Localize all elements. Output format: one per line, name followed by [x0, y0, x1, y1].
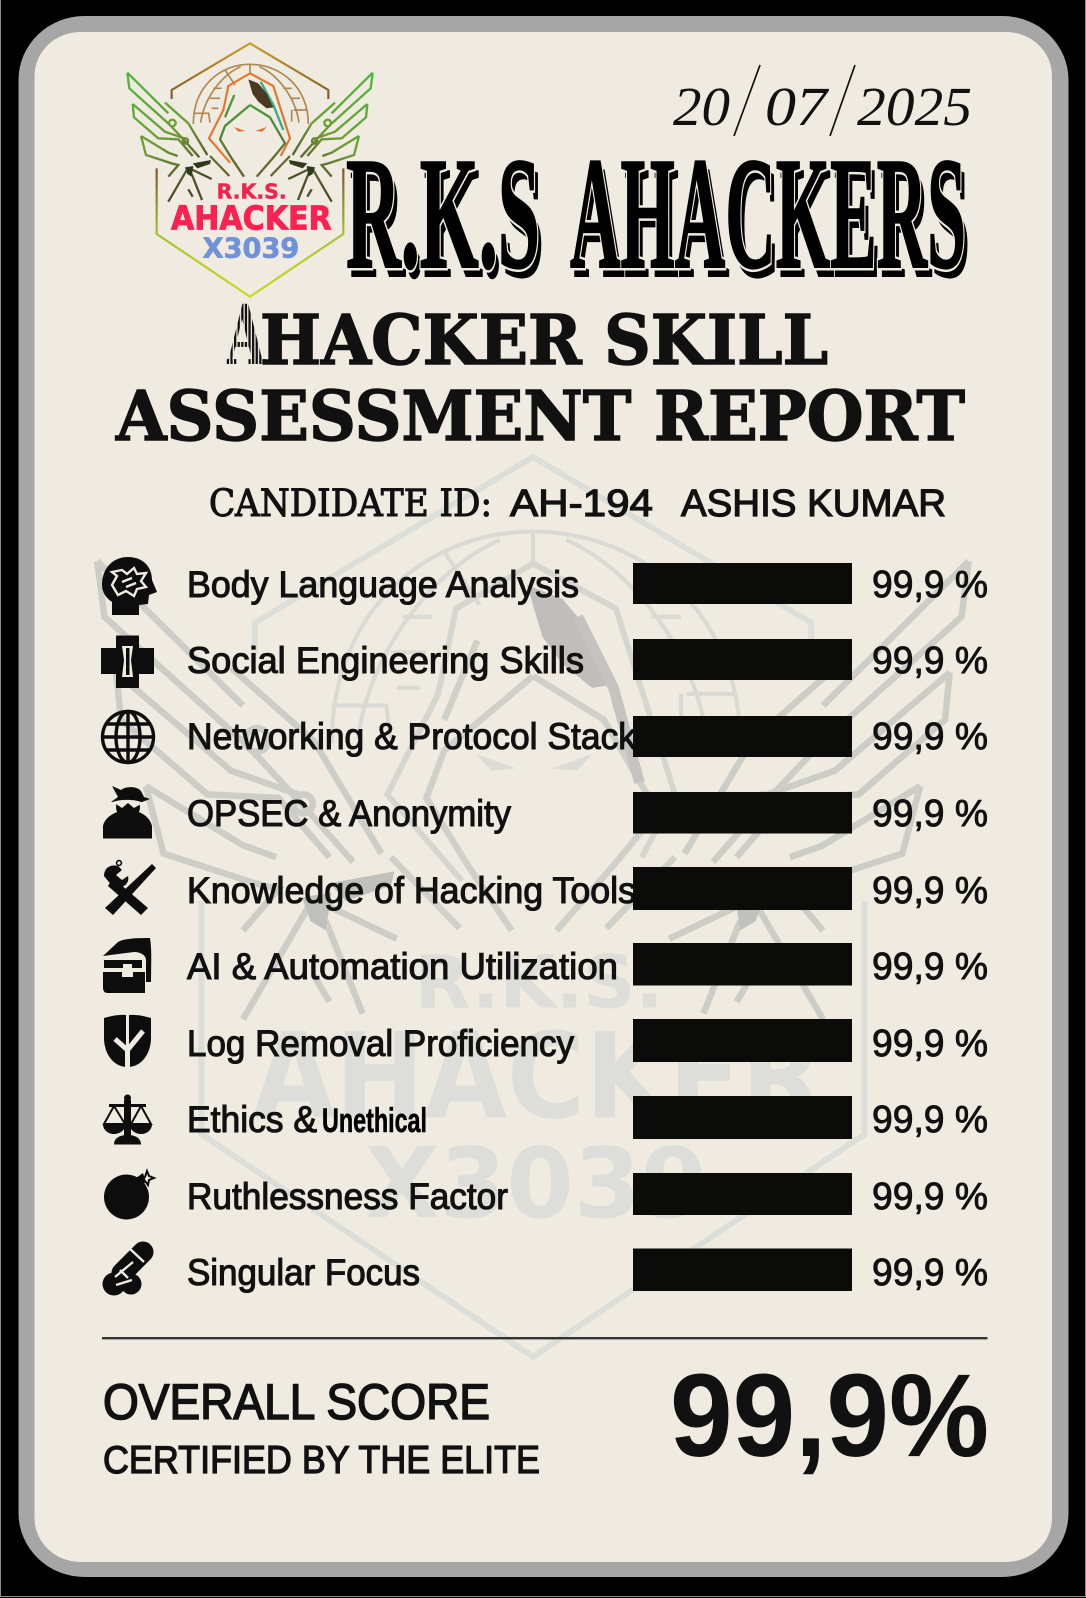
- row: Log Removal Proficiency: Log Removal Proficiency: [187, 1023, 574, 1064]
- watermark logo: AHACKER: [252, 1008, 823, 1146]
- row: Knowledge of Hacking Tools: Knowledge of Hacking Tools: [187, 870, 636, 911]
- row: Ruthlessness Factor: Ruthlessness Factor: [187, 1176, 508, 1217]
- icon: cross with door: [101, 636, 154, 688]
- report heading: [115, 288, 965, 457]
- row: Social Engineering Skills: Social Engineering Skills: [187, 640, 584, 681]
- icon: shield: [104, 1015, 151, 1067]
- overall score: [103, 1350, 989, 1482]
- row: Ethics & Unethical: [103, 1094, 988, 1144]
- row: Networking & Protocol Stack: [102, 712, 988, 762]
- row: Singular Focus: Singular Focus: [187, 1252, 420, 1293]
- row: Body Language Analysis: Body Language Analysis: [187, 564, 579, 605]
- row: Social Engineering Skills: [101, 636, 988, 688]
- row: Ruthlessness Factor: 99,9 %: [872, 1176, 988, 1218]
- skill rows: [101, 557, 988, 1296]
- date: 20: [673, 76, 730, 137]
- date: 2025: [857, 76, 972, 137]
- overall score: CERTIFIED BY THE ELITE: [103, 1439, 540, 1482]
- row: Ethics & Unethical: Unethical: [322, 1102, 427, 1140]
- icon: crossed tools: [104, 861, 156, 915]
- row: OPSEC & Anonymity: 99,9 %: [872, 793, 988, 835]
- row: Knowledge of Hacking Tools: 99,9 %: [872, 870, 988, 912]
- row: Ethics & Unethical: Ethics &: [187, 1099, 317, 1140]
- row: Networking & Protocol Stack: 99,9 %: [872, 716, 988, 758]
- logo: R.K.S.: [217, 179, 287, 203]
- row: Ruthlessness Factor: [104, 1171, 988, 1220]
- row: Networking & Protocol Stack: Networking & Protocol Stack: [187, 716, 636, 757]
- candidate line: AH-194: [510, 483, 653, 525]
- row: OPSEC & Anonymity: OPSEC & Anonymity: [187, 793, 511, 834]
- candidate line: CANDIDATE ID:: [209, 482, 492, 525]
- watermark logo: X3039: [365, 1127, 708, 1240]
- overall score: 99,9%: [670, 1350, 989, 1482]
- brand title: [346, 124, 970, 311]
- row: Log Removal Proficiency: [104, 1015, 988, 1067]
- watermark logo: R.K.S.: [415, 941, 663, 1026]
- report heading: A: [225, 288, 266, 384]
- row: AI & Automation Utilization: AI & Automation Utilization: [187, 946, 618, 987]
- row: Singular Focus: [102, 1247, 988, 1296]
- date: 07: [765, 76, 830, 137]
- row: Log Removal Proficiency: 99,9 %: [872, 1023, 988, 1065]
- brand title: R.K.S: [346, 124, 540, 302]
- logo: [127, 43, 373, 297]
- icon: scales: [103, 1094, 152, 1144]
- logo: X3039: [203, 233, 299, 264]
- logo: AHACKER: [171, 198, 332, 237]
- brand title: R.K.S: [350, 133, 544, 311]
- row: Singular Focus: 99,9 %: [872, 1252, 988, 1294]
- row: Body Language Analysis: [102, 557, 988, 615]
- row: Social Engineering Skills: 99,9 %: [872, 640, 988, 682]
- row: Ethics & Unethical: 99,9 %: [872, 1099, 988, 1141]
- report heading: HACKER SKILL: [260, 301, 828, 381]
- row: AI & Automation Utilization: [103, 938, 988, 993]
- row: Body Language Analysis: 99,9 %: [872, 564, 988, 606]
- brand title: R.K.S: [346, 124, 540, 302]
- watermark logo: [97, 457, 969, 1357]
- row: OPSEC & Anonymity: [103, 786, 988, 838]
- overall score: OVERALL SCORE: [103, 1374, 490, 1430]
- icon: head with brain: [102, 557, 157, 615]
- icon: globe: [102, 712, 154, 762]
- candidate line: ASHIS KUMAR: [681, 483, 946, 525]
- row: Knowledge of Hacking Tools: [104, 861, 988, 915]
- date: [673, 65, 972, 137]
- candidate line: [209, 482, 946, 525]
- row: AI & Automation Utilization: 99,9 %: [872, 946, 988, 988]
- icon: masked person: [103, 786, 152, 838]
- report heading: ASSESSMENT REPORT: [115, 377, 965, 457]
- icon: microphone: [102, 1247, 144, 1296]
- icon: bomb: [104, 1171, 154, 1220]
- icon: toolbox chest: [103, 938, 151, 993]
